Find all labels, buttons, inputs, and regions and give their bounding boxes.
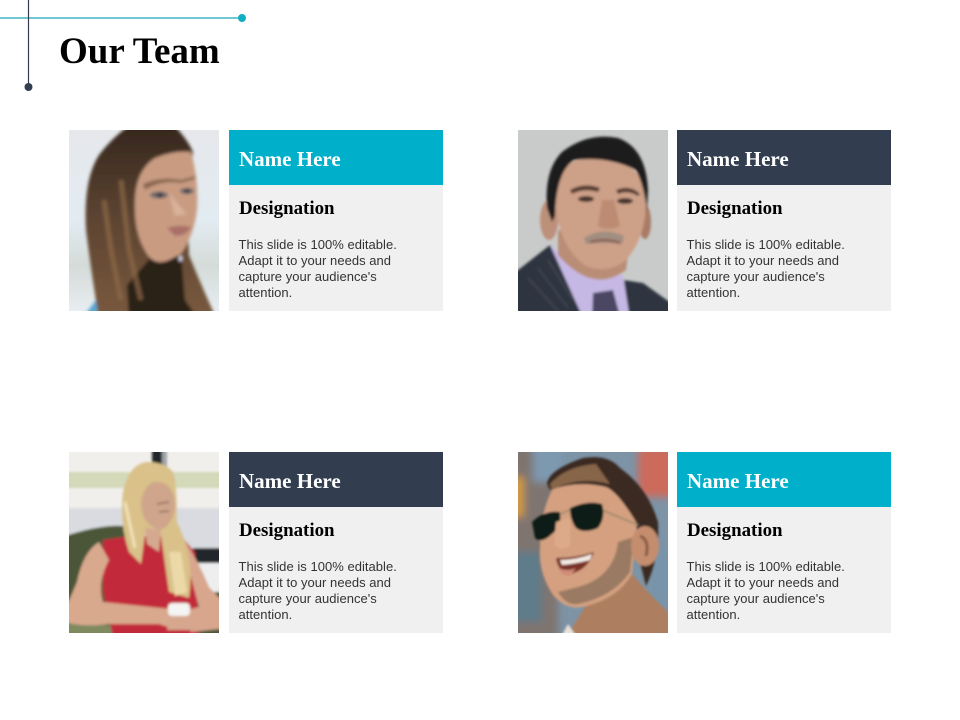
description: attention. bbox=[238, 284, 292, 300]
description: capture your audience's bbox=[686, 268, 825, 284]
name banner: Name Here bbox=[687, 147, 789, 171]
team card: bottom left bbox=[69, 452, 443, 633]
description: capture your audience's bbox=[238, 590, 377, 606]
description: Adapt it to your needs and bbox=[238, 574, 391, 590]
description: This slide is 100% editable. bbox=[686, 236, 845, 252]
team card: bottom right bbox=[518, 452, 891, 633]
info panel bbox=[677, 452, 891, 633]
description: Adapt it to your needs and bbox=[686, 574, 839, 590]
info panel bbox=[229, 452, 443, 633]
description: Adapt it to your needs and bbox=[686, 252, 839, 268]
team card: top right bbox=[518, 130, 891, 311]
name banner bbox=[229, 452, 443, 507]
name banner: Name Here bbox=[687, 469, 789, 493]
description: attention. bbox=[238, 606, 292, 622]
info panel bbox=[229, 130, 443, 311]
name banner bbox=[677, 130, 891, 185]
info panel bbox=[677, 130, 891, 311]
description: capture your audience's bbox=[686, 590, 825, 606]
name banner: Name Here bbox=[239, 147, 341, 171]
team card: top left bbox=[69, 130, 443, 311]
description bbox=[238, 236, 397, 300]
photo: blonde woman in red dress with coffee bbox=[69, 452, 219, 633]
designation: Designation bbox=[687, 520, 783, 541]
photo: man in pinstripe suit bbox=[518, 130, 668, 311]
description: attention. bbox=[686, 284, 740, 300]
header accent lines bbox=[0, 0, 246, 91]
designation: Designation bbox=[239, 520, 335, 541]
description bbox=[686, 236, 845, 300]
description: attention. bbox=[686, 606, 740, 622]
description bbox=[686, 558, 845, 622]
name banner: Name Here bbox=[239, 469, 341, 493]
description: capture your audience's bbox=[238, 268, 377, 284]
description: This slide is 100% editable. bbox=[686, 558, 845, 574]
photo: woman with long brown hair bbox=[69, 130, 219, 311]
description: This slide is 100% editable. bbox=[238, 236, 397, 252]
designation: Designation bbox=[239, 198, 335, 219]
name banner bbox=[677, 452, 891, 507]
description: Adapt it to your needs and bbox=[238, 252, 391, 268]
description bbox=[238, 558, 397, 622]
designation: Designation bbox=[687, 198, 783, 219]
photo: smiling man in sunglasses bbox=[518, 452, 668, 633]
title: Our Team bbox=[59, 31, 220, 72]
name banner bbox=[229, 130, 443, 185]
description: This slide is 100% editable. bbox=[238, 558, 397, 574]
